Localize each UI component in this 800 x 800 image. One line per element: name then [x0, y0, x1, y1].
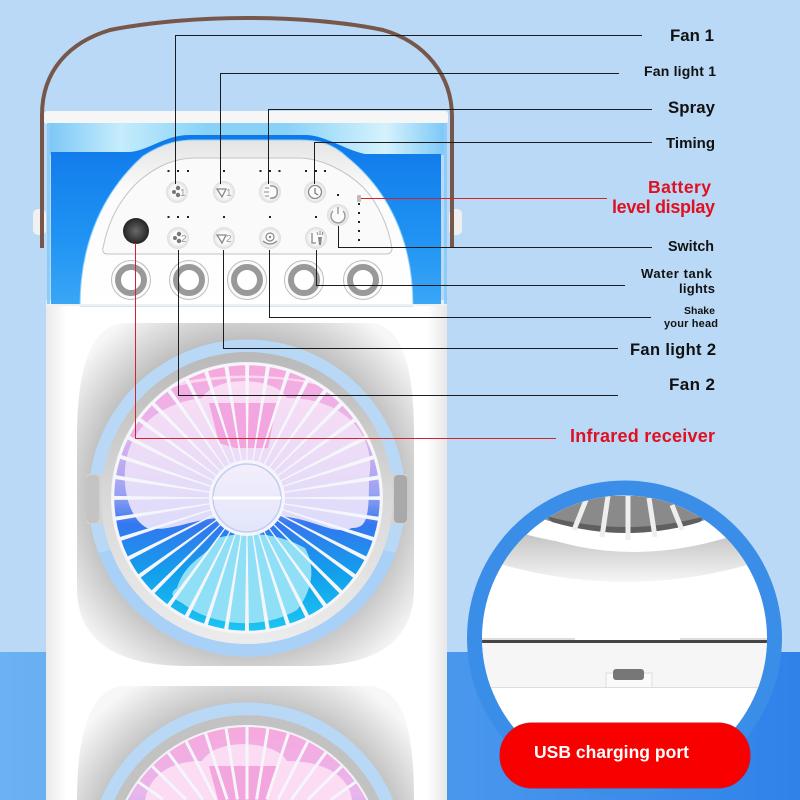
labels: Fan light 1 [644, 63, 716, 79]
handle [42, 18, 452, 248]
callout: USB charging port [500, 723, 750, 788]
control panel buttons [123, 170, 361, 249]
upper fan [77, 323, 414, 666]
red labels: Infrared receiver [570, 426, 715, 446]
labels: Switch [668, 239, 714, 255]
button: timing [304, 181, 326, 203]
control panel outline [103, 158, 392, 254]
red labels: Battery [648, 177, 711, 197]
battery indicator light [357, 195, 361, 202]
button: switch [327, 204, 349, 226]
button: fan light 2: 2 [226, 234, 232, 245]
labels: lights [679, 281, 715, 296]
white dome [80, 140, 413, 306]
inset: USB port close-up [467, 480, 782, 738]
button: fan 1 [166, 181, 188, 203]
button: fan light 1: 1 [226, 188, 232, 199]
knobs [112, 260, 382, 300]
labels: Fan 1 [670, 26, 714, 45]
button: spray [259, 181, 281, 203]
side clips [33, 150, 462, 248]
red labels: level display [612, 197, 715, 217]
leader lines [176, 36, 652, 396]
button: fan 2: 2 [181, 234, 187, 245]
callout: USB charging port: USB charging port [534, 742, 689, 762]
button: water tank lights [305, 227, 327, 249]
USB port [613, 669, 644, 680]
fan body [46, 300, 447, 800]
button: fan light 2 [213, 227, 235, 249]
lower fan [77, 686, 414, 800]
button: shake head [259, 227, 281, 249]
labels: Shake [684, 305, 715, 317]
water tank [44, 111, 448, 306]
labels: Fan light 2 [630, 341, 716, 359]
button: fan light 1 [213, 181, 235, 203]
labels [630, 26, 718, 394]
red labels [570, 177, 715, 446]
infrared receiver window [123, 218, 149, 244]
labels: Water tank [641, 266, 713, 281]
indicator dots [168, 170, 360, 241]
labels: Timing [666, 135, 715, 152]
labels: your head [664, 318, 718, 330]
red leader lines [136, 198, 607, 438]
labels: Spray [668, 98, 716, 117]
labels: Fan 2 [669, 375, 715, 394]
button: fan 1: 1 [180, 188, 186, 199]
button: fan 2 [167, 227, 189, 249]
